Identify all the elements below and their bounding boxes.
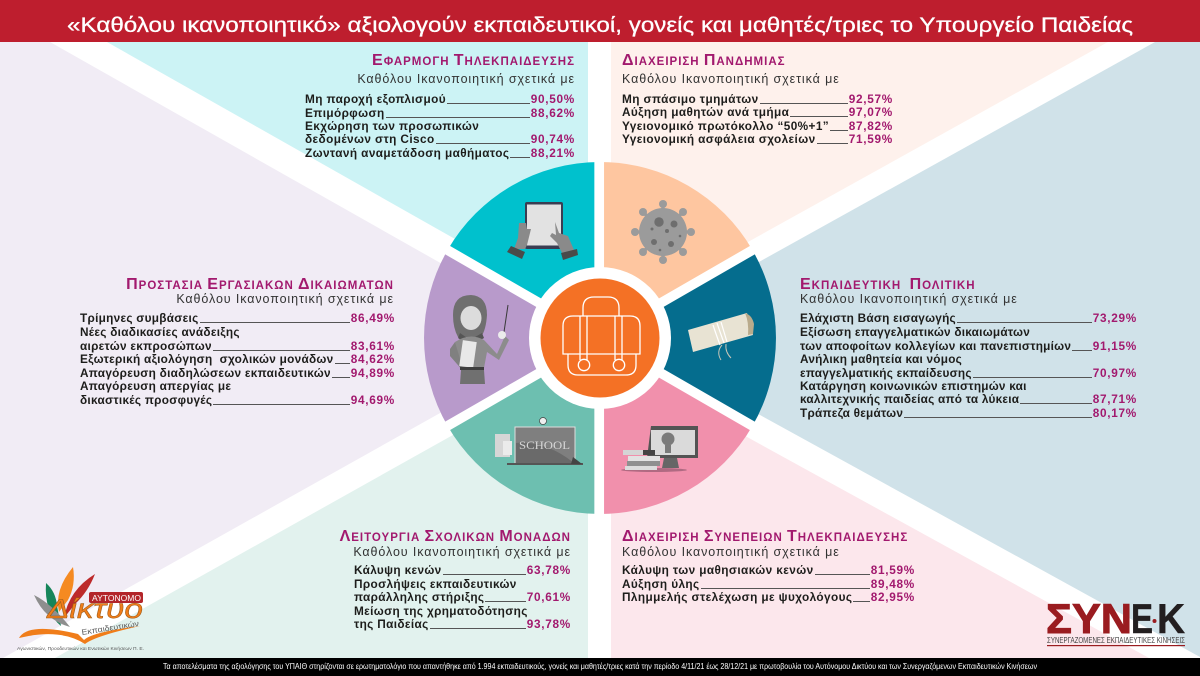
logo: Αυτόνομο Δίκτυο Εκπαιδευτικών: ΑΥΤΟΝΟΜΟ xyxy=(92,593,141,603)
icon: diploma scroll xyxy=(688,313,754,360)
row: 81,59% xyxy=(871,563,915,577)
subheading: Καθόλου Ικανοποιητική σχετικά με xyxy=(176,292,394,306)
heading: ΕΚΠΑΙΔΕΥΤΙΚΗ ΠΟΛΙΤΙΚΗ xyxy=(800,276,976,293)
row xyxy=(622,92,893,106)
subheading: Καθόλου Ικανοποιητική σχετικά με xyxy=(353,545,571,559)
logo: Αυτόνομο Δίκτυο Εκπαιδευτικών: Δίκτυο xyxy=(46,594,143,624)
row: 88,21% xyxy=(531,146,575,160)
logo: Αυτόνομο Δίκτυο Εκπαιδευτικών: Εκπαιδευτικών xyxy=(81,619,140,637)
row: Μείωση της χρηματοδότησης xyxy=(354,604,528,618)
row: 93,78% xyxy=(527,617,571,631)
row: 90,50% xyxy=(531,92,575,106)
row: 92,57% xyxy=(849,92,893,106)
row xyxy=(80,311,395,325)
row: καλλιτεχνικής παιδείας από τα λύκεια xyxy=(800,392,1019,406)
row: Απαγόρευση απεργίας με xyxy=(80,379,231,393)
row xyxy=(622,577,915,591)
subheading: Καθόλου Ικανοποιητική σχετικά με xyxy=(357,72,575,86)
row: Εξωτερική αξιολόγηση σχολικών μονάδων xyxy=(80,352,334,366)
row xyxy=(354,590,571,604)
row xyxy=(305,106,575,120)
row xyxy=(800,406,1137,420)
row xyxy=(800,366,1137,380)
row: Μη σπάσιμο τμημάτων xyxy=(622,92,759,106)
panel: Διαχείριση Συνεπειών Τηλεκπαιδεύσης xyxy=(622,528,915,604)
icon: school blackboard xyxy=(495,418,583,465)
row: 71,59% xyxy=(849,132,893,146)
row: 94,69% xyxy=(351,393,395,407)
row: 94,89% xyxy=(351,366,395,380)
row: Απαγόρευση διαδηλώσεων εκπαιδευτικών xyxy=(80,366,331,380)
row: 70,97% xyxy=(1093,366,1137,380)
heading: ΛΕΙΤΟΥΡΓΙΑ ΣΧΟΛΙΚΩΝ ΜΟΝΑΔΩΝ xyxy=(340,528,571,545)
row: παράλληλης στήριξης xyxy=(354,590,484,604)
logo: ΣΥΝΕΚ: Ε xyxy=(1131,595,1153,642)
row: 70,61% xyxy=(527,590,571,604)
row: 89,48% xyxy=(871,577,915,591)
subheading: Καθόλου Ικανοποιητική σχετικά με xyxy=(622,545,840,559)
row: Τράπεζα θεμάτων xyxy=(800,406,903,420)
logo: Αυτόνομο Δίκτυο Εκπαιδευτικών xyxy=(17,567,144,651)
row xyxy=(800,392,1137,406)
row: Εξίσωση επαγγελματικών δικαιωμάτων xyxy=(800,325,1030,339)
row xyxy=(80,393,395,407)
row xyxy=(622,563,915,577)
row: 63,78% xyxy=(527,563,571,577)
logo: Αυτόνομο Δίκτυο Εκπαιδευτικών: Αγωνιστικών, Προοδευτικών και Ενωτικών Κινήσεων Π. Ε. xyxy=(17,645,144,651)
logo: ΣΥΝΕΚ xyxy=(1046,595,1185,646)
heading: ΠΡΟΣΤΑΣΙΑ ΕΡΓΑΣΙΑΚΩΝ ΔΙΚΑΙΩΜΑΤΩΝ xyxy=(126,276,394,293)
row: της Παιδείας xyxy=(354,617,429,631)
row: 87,71% xyxy=(1093,392,1137,406)
row: αιρετών εκπροσώπων xyxy=(80,339,212,353)
row: Νέες διαδικασίες ανάδειξης xyxy=(80,325,240,339)
row: Αύξηση ύλης xyxy=(622,577,700,591)
row: Ανήλικη μαθητεία και νόμος xyxy=(800,352,962,366)
row: 73,29% xyxy=(1093,311,1137,325)
row: Μη παροχή εξοπλισμού xyxy=(305,92,446,106)
icon: tablet with hands xyxy=(507,202,578,260)
row: 90,74% xyxy=(531,132,575,146)
row: Υγειονομικό πρωτόκολλο “50%+1” xyxy=(622,119,829,133)
row: δικαστικές προσφυγές xyxy=(80,393,212,407)
panel: Λειτουργία Σχολικών Μονάδων xyxy=(340,528,571,631)
panel: Εκπαιδευτική Πολιτική xyxy=(800,276,1137,420)
logo: ΣΥΝΕΚ: Κ xyxy=(1157,595,1185,642)
row: Επιμόρφωση xyxy=(305,106,385,120)
row: Ελάχιστη Βάση εισαγωγής xyxy=(800,311,956,325)
row: Κατάργηση κοινωνικών επιστημών και xyxy=(800,379,1027,393)
row: Κάλυψη των μαθησιακών κενών xyxy=(622,563,814,577)
row: επαγγελματικής εκπαίδευσης xyxy=(800,366,972,380)
row: 83,61% xyxy=(351,339,395,353)
subheading: Καθόλου Ικανοποιητική σχετικά με xyxy=(622,72,840,86)
row: 84,62% xyxy=(351,352,395,366)
icon: monitor and books xyxy=(621,426,698,472)
row: Προσλήψεις εκπαιδευτικών xyxy=(354,577,517,591)
row: δεδομένων στη Cisco xyxy=(305,132,435,146)
row: Υγειονομική ασφάλεια σχολείων xyxy=(622,132,816,146)
row: 97,07% xyxy=(849,105,893,119)
row: Ζωντανή αναμετάδοση μαθήματος xyxy=(305,146,509,160)
row: 80,17% xyxy=(1093,406,1137,420)
row: 87,82% xyxy=(849,119,893,133)
panel: Εφαρμογή Τηλεκπαιδεύσης xyxy=(305,52,575,160)
row xyxy=(305,132,575,146)
row: Κάλυψη κενών xyxy=(354,563,442,577)
row xyxy=(622,105,893,119)
heading: ΕΦΑΡΜΟΓΗ ΤΗΛΕΚΠΑΙΔΕΥΣΗΣ xyxy=(372,52,575,69)
title banner: «Καθόλου ικανοποιητικό» αξιολογούν εκπαιδευτικοί, γονείς και μαθητές/τριες το Υπουργείο Παιδείας xyxy=(67,13,1133,37)
panel: Διαχείριση Πανδημίας xyxy=(622,52,893,146)
footer bar xyxy=(0,658,1200,676)
logo: ΣΥΝΕΚ: ΣΥΝ xyxy=(1046,595,1132,642)
heading: ΔΙΑΧΕΙΡΙΣΗ ΠΑΝΔΗΜΙΑΣ xyxy=(622,52,786,69)
icon: virus xyxy=(631,200,695,264)
row: Αύξηση μαθητών ανά τμήμα xyxy=(622,105,789,119)
row xyxy=(305,92,575,106)
row: των αποφοίτων κολλεγίων και πανεπιστημίων xyxy=(800,339,1071,353)
heading: ΔΙΑΧΕΙΡΙΣΗ ΣΥΝΕΠΕΙΩΝ ΤΗΛΕΚΠΑΙΔΕΥΣΗΣ xyxy=(622,528,908,545)
footer bar: Τα αποτελέσματα της αξιολόγησης του ΥΠΑΙΘ στηρίζονται σε ερωτηματολόγιο που απαντήθηκε από 1.994 εκπαιδευτικούς, γονείς και μαθητές/τριες κατά την περίοδο 4/11/21 έως 28/12/21 με πρωτοβουλία του Αυτόνομου Δικτύου και των Συνεργαζόμενων Εκπαιδευτικών Κινήσεων xyxy=(163,661,1037,671)
icon: school blackboard: SCHOOL xyxy=(519,440,570,452)
row: Τρίμηνες συμβάσεις xyxy=(80,311,199,325)
wheel segments xyxy=(424,150,776,526)
row: Πλημμελής στελέχωση με ψυχολόγους xyxy=(622,590,852,604)
panel: Προστασία Εργασιακών Δικαιωμάτων xyxy=(80,276,395,407)
icon: school bag in orange circle xyxy=(540,278,660,398)
row: 82,95% xyxy=(871,590,915,604)
row: 91,15% xyxy=(1093,339,1137,353)
row xyxy=(800,311,1137,325)
icon: teacher xyxy=(450,295,509,384)
row xyxy=(354,563,571,577)
title banner xyxy=(0,0,1200,42)
row: Εκχώρηση των προσωπικών xyxy=(305,119,479,133)
subheading: Καθόλου Ικανοποιητική σχετικά με xyxy=(800,292,1018,306)
row xyxy=(80,339,395,353)
row: 88,62% xyxy=(531,106,575,120)
row: 86,49% xyxy=(351,311,395,325)
row xyxy=(354,617,571,631)
